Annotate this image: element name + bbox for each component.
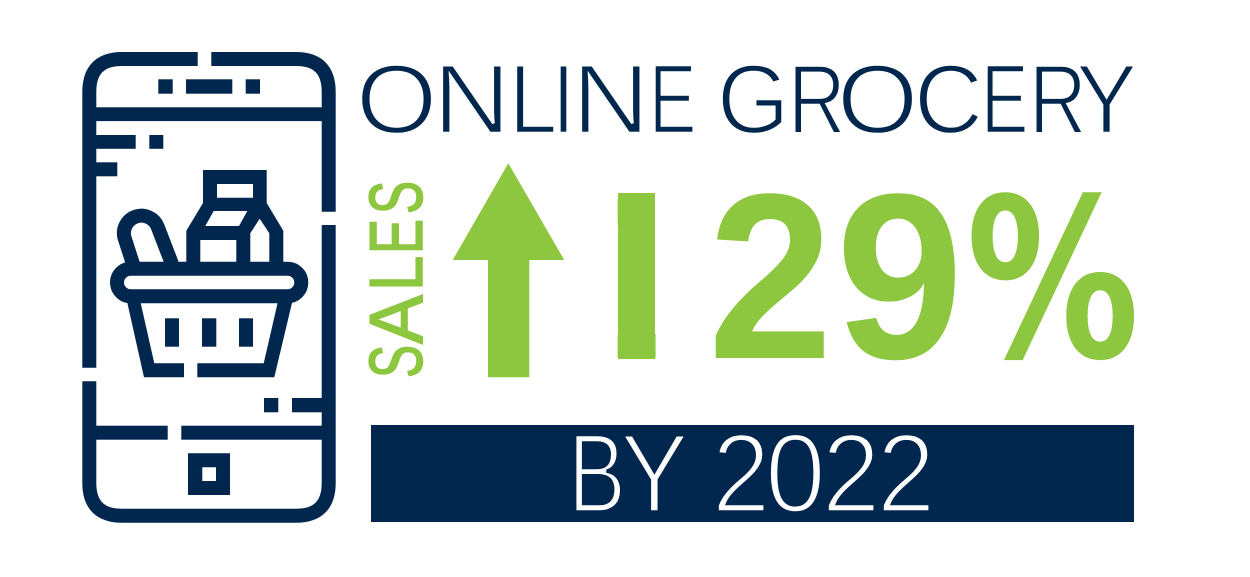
banner text: 2 (822, 411, 880, 536)
banner text: Y (620, 411, 689, 536)
arrow: upward (453, 163, 564, 377)
title: online grocery: E (649, 44, 696, 154)
title: online grocery: O (356, 44, 437, 154)
label: sales: S (354, 181, 438, 214)
digit stem of 1 (618, 193, 655, 359)
banner text: B (568, 411, 626, 536)
title: online grocery (356, 44, 1137, 154)
digits and percent sign (618, 145, 1139, 410)
banner text (568, 411, 935, 536)
title: online grocery: R (788, 44, 845, 154)
label: sales: E (354, 219, 438, 254)
icon: milk carton (186, 170, 283, 264)
digits and percent sign: % (966, 152, 1139, 410)
statistic: 129% (618, 145, 1139, 410)
banner text: 2 (712, 411, 770, 536)
title: online grocery: C (914, 44, 983, 154)
label: sales: S (354, 345, 438, 378)
icon: basket slots (165, 318, 253, 347)
label: sales: A (354, 295, 438, 344)
phone screen details (89, 79, 329, 495)
digits and percent sign: 2 (708, 145, 833, 409)
icon: baguette (124, 216, 172, 264)
banner text: 2 (877, 411, 935, 536)
banner text: 0 (765, 411, 825, 536)
title: online grocery: R (1029, 44, 1086, 154)
infographic canvas (82, 52, 1134, 523)
title: online grocery: E (981, 44, 1029, 154)
digits and percent sign: 9 (836, 145, 963, 409)
title: online grocery: N (433, 44, 511, 154)
title: online grocery: N (572, 44, 650, 154)
label: sales (354, 181, 438, 378)
digits and percent sign: 1 (566, 145, 697, 409)
title: online grocery: Y (1076, 44, 1137, 154)
icon: smartphone with grocery basket (89, 59, 329, 516)
banner: by 2022 (371, 425, 1134, 522)
title: online grocery: I (552, 44, 575, 154)
icon: basket rim (117, 269, 301, 296)
phone outline (89, 59, 329, 516)
title: online grocery: O (836, 44, 918, 154)
title: online grocery: G (717, 44, 790, 154)
title: online grocery: L (508, 44, 557, 154)
label: sales: L (354, 257, 438, 292)
icon: basket body (127, 300, 293, 377)
